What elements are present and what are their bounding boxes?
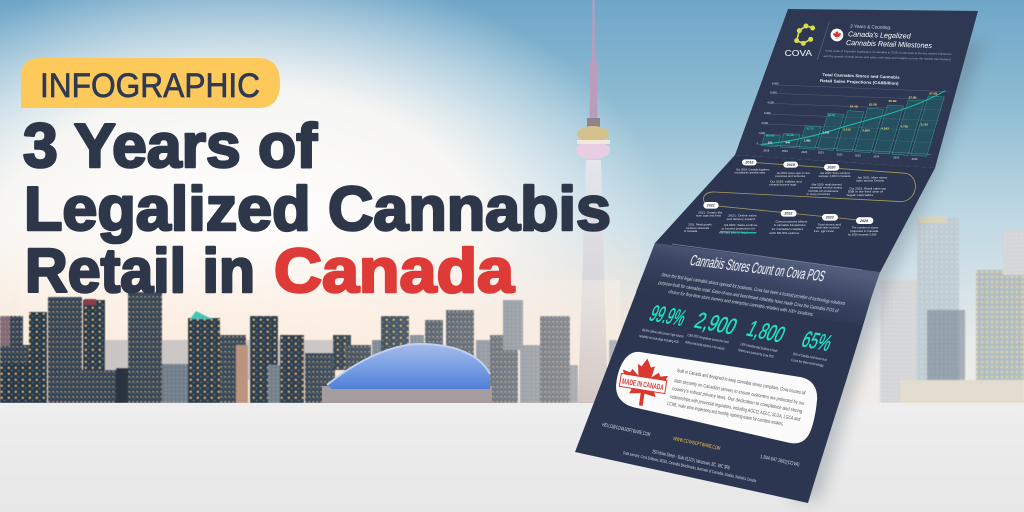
title: Retail in: [25, 237, 255, 306]
panel heading: Canada's Legalized: [848, 29, 912, 41]
brochure panel: sales chart: [735, 9, 978, 168]
stats panel intro: purpose-built for cannabis retail. Ease-of-use and benchmark reliability have made Cova the Cannabis POS of: [657, 280, 840, 314]
callout text: [667, 368, 806, 427]
icon: red maple leaf stamp: MADE IN CANADA: [621, 377, 664, 392]
stat captions: 65% of Canada retail stores trust: [793, 352, 827, 362]
brochure: [575, 9, 978, 503]
stat captions: 2,900 POS integrations across the most: [687, 333, 729, 344]
icon: Canadian flag badge: [831, 29, 843, 41]
milestone notes: the third year of legalization: [719, 230, 757, 234]
milestone notes: surpass 1,000 in Canada: [819, 174, 851, 178]
stat captions: 1,800 cannabis retail locations in North: [740, 342, 778, 353]
fold line: [672, 244, 862, 270]
milestone notes: with 99.9% uptime: [769, 231, 800, 235]
bar and line chart: 644: [786, 141, 791, 145]
milestone notes: in many provinces: [807, 192, 831, 196]
milestone notes: Jan 2021: More stores: [857, 176, 888, 180]
bar and line chart: 5,000: [770, 90, 777, 94]
title: [23, 112, 611, 306]
brochure panel: milestone timeline: 2026: [859, 219, 869, 223]
stat numbers: 99.9%: [646, 301, 690, 331]
brochure footer: WWW.COVASOFTWARE.COM: [673, 436, 721, 452]
stat numbers: 2,900: [691, 308, 741, 339]
title: Legalized Cannabis: [24, 175, 611, 244]
panel intro text: [823, 49, 952, 61]
bar and line chart: 2025: [893, 156, 900, 160]
bar and line chart: 6,000: [772, 82, 779, 86]
CN Tower: [576, 0, 610, 403]
panel intro text: In the wake of Canada's legalization of cannabis in 2018, a look back at the key market milestones: [825, 49, 952, 56]
bar and line chart: 1,762: [823, 131, 830, 135]
panel heading: [846, 24, 932, 50]
milestone notes: projected in Canada: [850, 229, 879, 233]
brochure footer: HELLO@COVASOFTWARE.COM: [602, 422, 651, 438]
milestone notes: $3B in the third year of: [848, 190, 883, 194]
chart title: Retail Sales Projections (CA$Billion): [820, 78, 899, 86]
icon: red maple leaf stamp: [618, 355, 670, 409]
milestone notes: Jan 2020: Store numbers: [820, 171, 851, 175]
stadium dome: [322, 344, 492, 403]
bar and line chart: 1,455: [804, 139, 811, 143]
stat captions: America are powered by Cova POS: [738, 348, 774, 359]
brochure shadow: [790, 40, 985, 500]
milestone notes: Oct 2019: edibles and: [770, 179, 802, 183]
bar and line chart: 4,293: [881, 126, 889, 130]
bar and line chart: 3,010: [843, 128, 851, 132]
milestone notes: in Canada: [684, 229, 698, 233]
bar and line chart: 1,000: [758, 131, 765, 135]
milestone notes: Cova processes billions: [776, 220, 808, 224]
floor: [0, 403, 1024, 512]
brochure panel: milestone timeline: 2022: [783, 212, 792, 216]
milestone notes: to exceed projections for: [722, 226, 755, 230]
title: Canada: [274, 237, 515, 306]
milestone notes: Oct 2018: Canada legalizes: [736, 167, 770, 171]
stat captions: Cova for their technology: [791, 358, 824, 368]
stat captions: widely-used loyalty solutions in the industry: [685, 340, 725, 351]
milestone notes: 2021: Online sales: [728, 214, 758, 218]
panel heading: Cannabis Retail Milestones: [846, 38, 932, 50]
stat numbers: 65%: [798, 327, 836, 355]
milestone notes: by 2026 exceeds 5,000: [848, 232, 877, 236]
milestone notes: recreational cannabis sales: [735, 170, 766, 174]
milestone notes: 2021: Retail growth: [688, 223, 712, 227]
bar and line chart: 2019: [782, 149, 788, 153]
bar and line chart: 2018: [763, 148, 770, 152]
milestone notes: store caps and limits: [696, 214, 722, 218]
callout text: Built in Canada and designed to keep cannabis stores compliant, Cova houses all: [677, 368, 806, 397]
bar and line chart: 4,000: [767, 100, 774, 104]
milestone notes: Oct 2021: Retail sales top: [849, 186, 887, 190]
bar and line chart: 2022: [837, 152, 843, 156]
callout text: CCRB, make store inspections and monthly reporting easier for cannabis retailers.: [667, 401, 784, 427]
title: 3 Years of: [23, 112, 317, 181]
milestone notes: to grow: [814, 229, 834, 233]
stats panel heading: Cannabis Stores Count on Cova POS: [688, 253, 827, 285]
brochure footer: 1.844.647.2682(COVA): [760, 454, 800, 468]
brochure panel: milestone timeline: 2018: [744, 161, 754, 165]
left city skyline: [0, 280, 620, 403]
bar and line chart: $7.6B: [929, 91, 938, 95]
milestone notes: The number of stores: [852, 226, 879, 230]
bar and line chart: $0.05B: [766, 134, 775, 138]
bar and line chart: $3.2B: [828, 113, 835, 117]
milestone notes: legal cannabis: [847, 193, 874, 197]
milestone notes: 2021: Ontario lifts: [698, 210, 723, 214]
bar and line chart: 2021: [818, 151, 824, 155]
stat numbers: 1,800: [743, 316, 790, 347]
icon: Cova logo: [795, 24, 814, 45]
right faded skyline: [880, 217, 1024, 403]
milestone notes: in cannabis transactions: [774, 223, 806, 227]
bar and line chart: $6.2B: [889, 99, 897, 103]
bar and line chart: 2024: [873, 154, 880, 158]
fold highlight: [636, 243, 880, 325]
bar and line chart: 2023: [855, 153, 861, 157]
milestone notes: Mar 2020: retail deemed: [812, 183, 842, 187]
stats panel intro: choice for first-time store owners and enterprise cannabis retailers with 100+ locations.: [667, 289, 815, 318]
milestone notes: continues nationwide: [686, 226, 710, 230]
bar and line chart: 2020: [801, 150, 808, 154]
brochure panel: milestone timeline: 2021: [706, 204, 715, 208]
milestone notes: COVID-19 shutdowns: [808, 189, 839, 193]
milestone notes: provinces and territories: [775, 174, 806, 178]
stat captions: 99.9% uptime with proven high-volume: [642, 328, 684, 339]
brochure panel: milestone timeline: 2020: [826, 166, 835, 170]
stat captions: [639, 328, 827, 368]
bar and line chart: $2.7B: [807, 126, 814, 130]
sky background: [0, 0, 1024, 404]
bar and line chart: 2,000: [761, 121, 768, 125]
bar and line chart: 161: [768, 140, 773, 144]
milestone notes: for Canadian retailers: [772, 227, 804, 231]
stat numbers: [646, 301, 836, 355]
brochure panel: bottom fold with stats: [575, 155, 935, 503]
milestone notes: extracts become legal: [769, 182, 796, 186]
callout: made in Canada: [616, 352, 817, 443]
bar and line chart: $5.0B: [869, 103, 878, 107]
brochure footer: 250 Howe Street - Suite #1210 | Vancouver, BC, V6C 3R8: [652, 449, 730, 471]
chart title: [820, 72, 901, 86]
bar and line chart: [757, 82, 948, 161]
callout text: country's robust privacy laws. Our dedication to compliance and strong: [672, 386, 803, 415]
bar and line chart: 3,900: [862, 129, 870, 133]
panel heading: 3 Years & Counting:: [850, 24, 892, 30]
Cova wordmark: COVA: [785, 49, 813, 58]
bar and line chart: 4,700: [901, 125, 908, 129]
milestone notes: [684, 167, 888, 236]
brochure panel: milestone timeline: 2023: [825, 216, 834, 220]
badge: INFOGRAPHIC: INFOGRAPHIC: [40, 67, 260, 105]
bar and line chart: $4.4B: [850, 105, 859, 109]
callout text: relationships with provincial regulators, including AGCO, AGLC, SLGA, LGCA and: [670, 394, 801, 423]
stat captions: reliability on peak days including 4/20: [639, 334, 679, 344]
brochure panel: milestone timeline: [684, 159, 915, 236]
brochure panel: milestone timeline: 2019: [786, 163, 796, 167]
milestone notes: open across Ontario: [856, 179, 885, 183]
bar and line chart: 0: [757, 141, 759, 145]
bar and line chart: 5,116: [921, 123, 928, 127]
chart title: Total Cannabis Stores and Cannabis: [822, 72, 901, 80]
milestone notes: Q3 2021: Sales continue: [724, 223, 758, 227]
bar and line chart: 2026: [912, 157, 918, 161]
milestone notes: Total stores and: [818, 222, 842, 226]
panel intro text: and the growth of retail stores and sales, with data and insights on how the market has matured.: [823, 54, 952, 61]
milestone notes: retail sales continue: [816, 226, 840, 230]
bar and line chart: $7.0B: [909, 96, 917, 100]
brochure footer: [602, 422, 800, 483]
badge: INFOGRAPHIC: [21, 58, 280, 108]
milestone notes: Jan 2019: stores open in more: [777, 171, 810, 175]
milestone notes: essential service during: [810, 186, 843, 190]
bar and line chart: 3,000: [764, 111, 771, 115]
stats panel intro: Since the first legal cannabis stores opened for business, Cova has been a trusted provider of technology solutions: [660, 272, 846, 307]
callout text: data securely on Canadian servers to ensure customers are protected by our: [674, 378, 805, 407]
brochure footer: Data sources: Cova Software, BDSA, Cannabis Benchmarks, Burrower of Cannabis, Statista, Statistics Canada: [623, 450, 757, 483]
milestone notes: and delivery expand: [727, 217, 756, 221]
bar and line chart: $0.9B: [787, 133, 794, 137]
